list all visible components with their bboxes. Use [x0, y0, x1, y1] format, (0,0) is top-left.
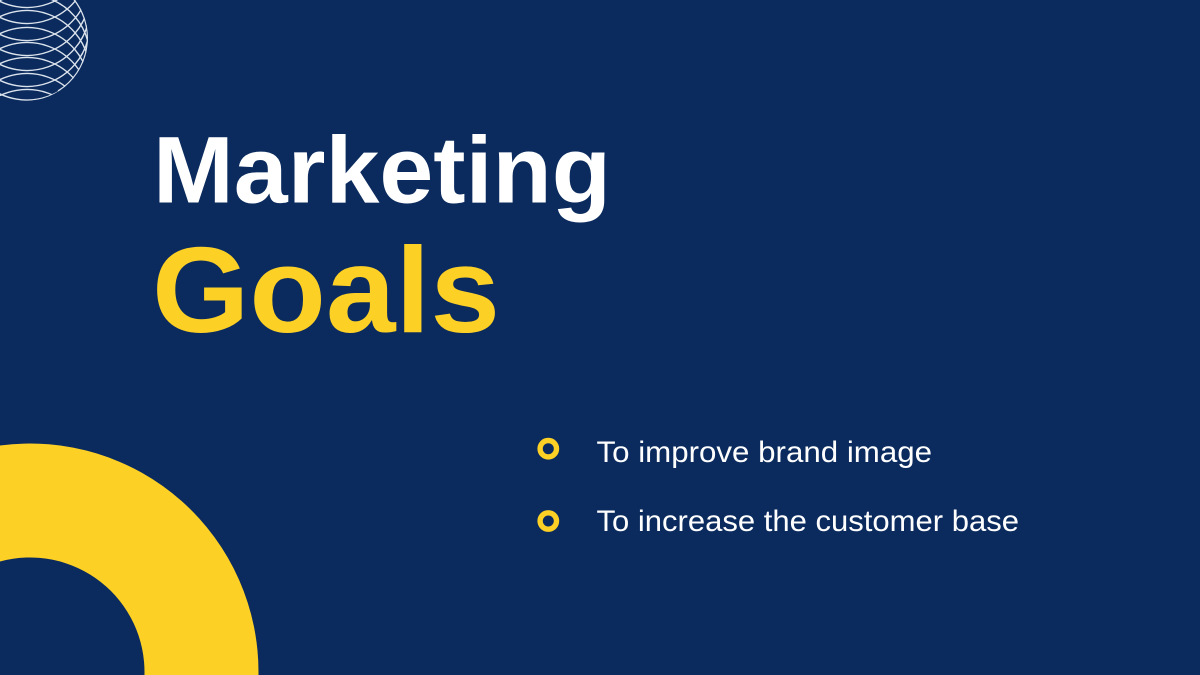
title: Goals: Goals	[152, 222, 500, 358]
text: customer base goal: To increase the customer base	[596, 505, 1019, 538]
decorative yellow ring	[0, 444, 258, 675]
goals list	[540, 436, 1019, 538]
text: brand image goal: To improve brand image	[596, 436, 932, 469]
list item: customer base	[540, 505, 1019, 538]
icon: bullet ring	[540, 440, 556, 457]
title: Marketing: Marketing	[153, 118, 611, 224]
icon: bullet ring	[540, 513, 556, 529]
list item: brand image	[540, 436, 932, 469]
icon: wireframe globe	[0, 0, 88, 101]
